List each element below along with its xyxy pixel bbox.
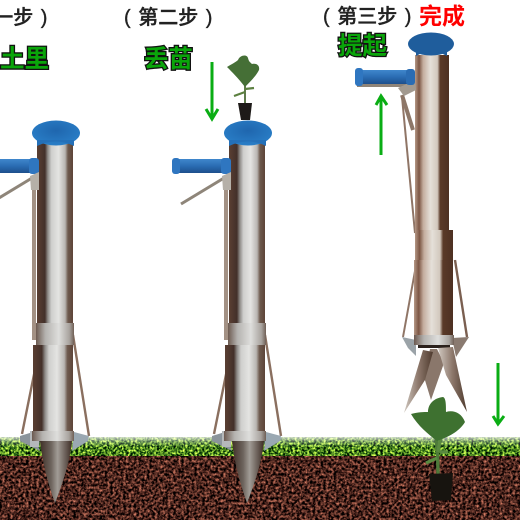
arrow: finish down — [493, 363, 504, 424]
label: step 3 action: 提起 — [338, 32, 387, 60]
step 2 tool — [172, 120, 281, 503]
label: step 2: ( 第二步 ) — [124, 6, 212, 29]
label: step 3: ( 第三步 ) — [323, 5, 411, 28]
ground: soil — [0, 456, 520, 520]
arrow: step 3 up — [376, 96, 387, 155]
seedling dropped into soil — [411, 397, 465, 501]
step 1 tool — [0, 120, 89, 503]
step 3 tool raised with open claws — [355, 32, 469, 413]
ground: grass strip — [0, 435, 520, 458]
label: finished: 完成 — [419, 3, 465, 29]
seedling in step 2 — [227, 56, 259, 120]
arrow: step 2 down — [206, 62, 218, 119]
label: step 2 action: 丢苗 — [144, 45, 193, 73]
